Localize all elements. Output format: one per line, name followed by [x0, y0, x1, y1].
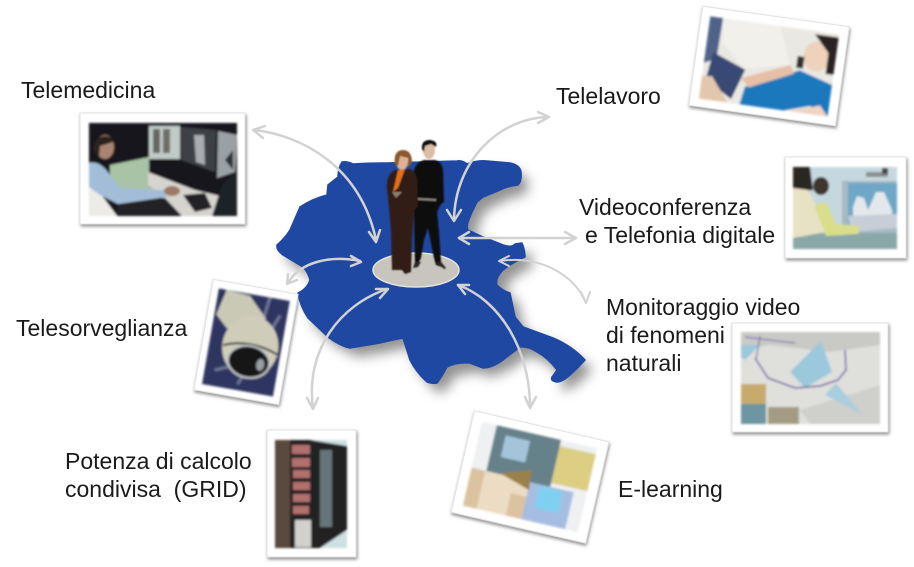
woman: [387, 150, 418, 274]
arrow: Telesorveglianza: [287, 256, 361, 284]
label: Monitoraggio video di fenomeni naturali: naturali: [606, 350, 681, 376]
man: [413, 140, 446, 269]
label: Monitoraggio video di fenomeni naturali: [606, 294, 800, 376]
label: Potenza di calcolo condivisa (GRID): [65, 448, 252, 502]
arrow: Potenza di calcolo: [307, 289, 388, 409]
label: Videoconferenza e Telefonia digitale: e Telefonia digitale: [585, 222, 775, 248]
map shadow: [285, 170, 593, 392]
label: Telelavoro: Telelavoro: [556, 83, 661, 109]
label: Videoconferenza e Telefonia digitale: Videoconferenza: [579, 194, 751, 220]
photo: E-learning: [451, 411, 609, 543]
map of the territory: [277, 161, 585, 383]
photo: Telemedicina: [80, 113, 245, 224]
label: Monitoraggio video di fenomeni naturali: Monitoraggio video: [606, 294, 800, 320]
arrow: Monitoraggio video: [499, 256, 590, 303]
arrow: Telemedicina: [253, 126, 380, 242]
photo: Telesorveglianza camera: [194, 279, 298, 405]
arrow: Videoconferenza: [459, 232, 576, 244]
label: E-learning: E-learning: [618, 476, 723, 502]
photo: Monitoraggio video: [732, 323, 888, 432]
label: Telesorveglianza: Telesorveglianza: [16, 315, 188, 341]
label: Monitoraggio video di fenomeni naturali: di fenomeni: [606, 322, 725, 348]
people standing on platform: [387, 140, 446, 274]
arrow: Telelavoro: [447, 112, 549, 221]
label: Potenza di calcolo condivisa (GRID): condivisa (GRID): [65, 476, 246, 502]
label: Videoconferenza e Telefonia digitale: [579, 194, 775, 248]
arrow: E-learning: [458, 285, 536, 408]
photo: GRID server rack: [267, 430, 356, 557]
label: Telemedicina: Telemedicina: [21, 77, 155, 103]
photo: Videoconferenza: [785, 157, 906, 258]
label: Potenza di calcolo condivisa (GRID): Potenza di calcolo: [65, 448, 252, 474]
photo: Telelavoro: [689, 6, 849, 126]
central platform ellipse: [373, 253, 459, 287]
